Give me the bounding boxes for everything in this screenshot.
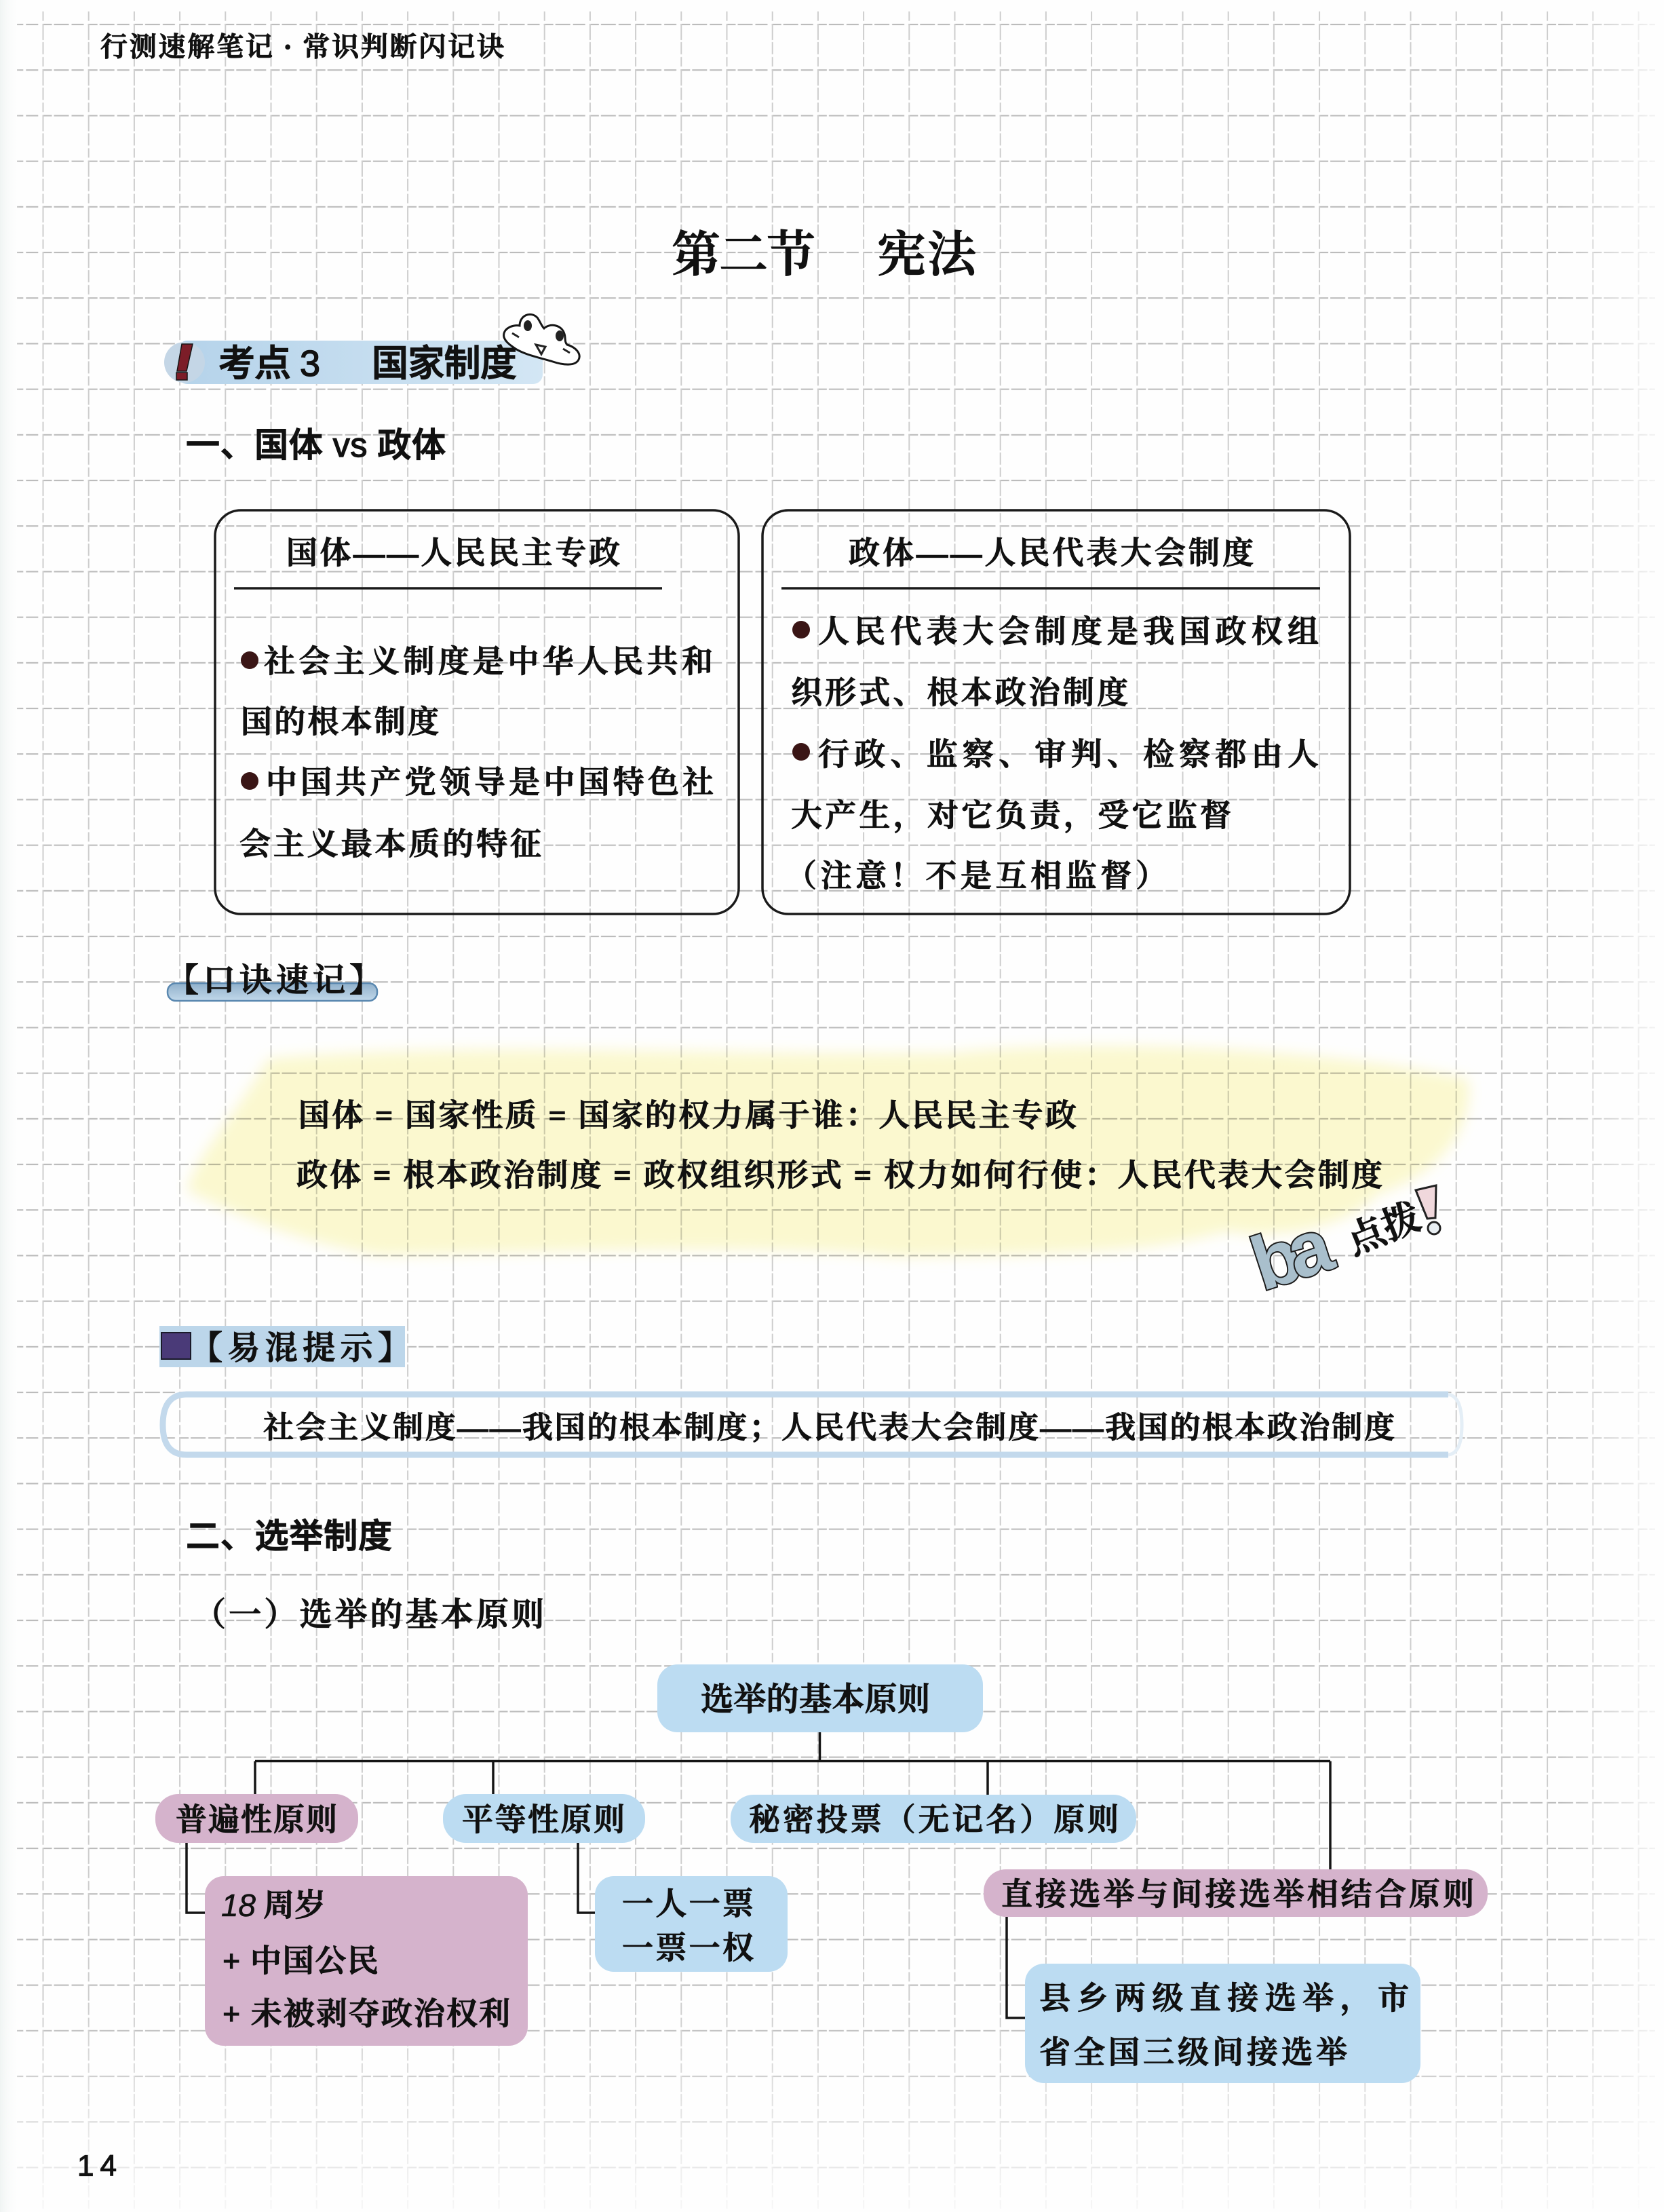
panel text: 政体 bullets: （注意！不是互相监督） <box>786 859 1167 893</box>
panel text: 国体 bullets: 中国共产党领导是中国特色社 <box>266 765 714 799</box>
panel text: 政体 bullets: 织形式、根本政治制度 <box>791 676 1128 710</box>
box: 普遍性原则 detail <box>205 1876 528 2046</box>
node: 普遍性原则: 普遍性原则 <box>176 1802 337 1837</box>
mnemonic text: 国体 = 国家性质 = 国家的权力属于谁：人民民主专政 <box>298 1098 1077 1133</box>
heading banner: 考点3 国家制度: 国家制度 <box>372 343 517 384</box>
icon: ba 点拨!: ba <box>1241 1202 1342 1307</box>
subheading: 选举的基本原则: （一）选举的基本原则 <box>193 1597 544 1633</box>
node: 普遍性原则 <box>155 1794 358 1843</box>
box: 普遍性原则 detail: + 中国公民 <box>222 1943 379 1979</box>
title: 宪法 <box>877 228 979 282</box>
box: 普遍性原则 detail: + 未被剥夺政治权利 <box>222 1996 510 2032</box>
callout: 易混提示 text: 社会主义制度——我国的根本制度；人民代表大会制度——我国的根本政治制度 <box>263 1411 1395 1445</box>
node: 秘密投票（无记名）原则: 秘密投票（无记名）原则 <box>749 1802 1119 1837</box>
panel text: 国体 bullets: 会主义最本质的特征 <box>239 826 541 862</box>
node: 选举的基本原则 <box>657 1664 983 1732</box>
panel title: 国体: 国体——人民民主专政 <box>286 536 620 570</box>
panel text: 政体 bullets: 大产生，对它负责，受它监督 <box>791 798 1231 833</box>
section heading: 选举制度: 二、选举制度 <box>186 1517 392 1555</box>
title <box>672 228 979 282</box>
node: 直接选举与间接选举相结合原则: 直接选举与间接选举相结合原则 <box>1001 1877 1474 1912</box>
mnemonic text: 政体 = 根本政治制度 = 政权组织形式 = 权力如何行使：人民代表大会制度 <box>296 1158 1382 1193</box>
heading banner: 考点3 国家制度 <box>164 341 543 384</box>
node: 平等性原则: 平等性原则 <box>462 1802 625 1837</box>
box: 直接间接选举 detail <box>1025 1964 1420 2083</box>
page number: 14 <box>77 2150 117 2182</box>
panel title: 政体: 政体——人民代表大会制度 <box>849 536 1254 570</box>
tree connectors <box>187 1732 1330 2018</box>
panel text: 政体 bullets: 行政、监察、审判、检察都由人 <box>818 737 1319 772</box>
panel text: 政体 bullets <box>786 615 1319 893</box>
icon: ba 点拨! <box>1241 1185 1440 1307</box>
callout: 易混提示 text <box>163 1394 1462 1455</box>
title: 第二节 <box>672 228 815 282</box>
box: 平等性原则 detail: 一人一票 <box>622 1886 754 1922</box>
yellow highlight blob <box>187 1046 1469 1257</box>
running header: 行测速解笔记 · 常识判断闪记诀 <box>100 31 504 62</box>
icon: ba 点拨!: 点拨 <box>1340 1196 1427 1263</box>
node: 秘密投票（无记名）原则 <box>731 1795 1136 1843</box>
box: 直接间接选举 detail: 县乡两级直接选举，市 <box>1039 1981 1409 2017</box>
panel text: 国体 bullets: 社会主义制度是中华人民共和 <box>264 645 713 679</box>
section heading: 国体 vs 政体: 一、国体 vs 政体 <box>186 426 446 464</box>
label: 口诀速记: 【口诀速记】 <box>166 962 382 999</box>
panel text: 政体 bullets: 人民代表大会制度是我国政权组 <box>818 615 1319 649</box>
heading: 易混提示: 【易混提示】 <box>190 1330 410 1367</box>
panel: 政体 <box>762 510 1350 914</box>
panel text: 国体 bullets <box>239 645 714 862</box>
mnemonic text <box>296 1098 1382 1193</box>
box: 平等性原则 detail <box>595 1876 788 1972</box>
panel: 国体 <box>215 510 739 914</box>
node: 直接选举与间接选举相结合原则 <box>984 1869 1488 1917</box>
icon: frog <box>504 314 579 364</box>
box: 直接间接选举 detail: 省全国三级间接选举 <box>1039 2036 1347 2070</box>
heading banner: 考点3 国家制度: 考点 3 <box>218 343 320 384</box>
node: 选举的基本原则: 选举的基本原则 <box>701 1681 930 1718</box>
box: 平等性原则 detail: 一票一权 <box>622 1931 754 1965</box>
box: 普遍性原则 detail: 18 周岁 <box>221 1888 326 1923</box>
node: 平等性原则 <box>443 1794 645 1843</box>
panel text: 国体 bullets: 国的根本制度 <box>241 704 439 740</box>
